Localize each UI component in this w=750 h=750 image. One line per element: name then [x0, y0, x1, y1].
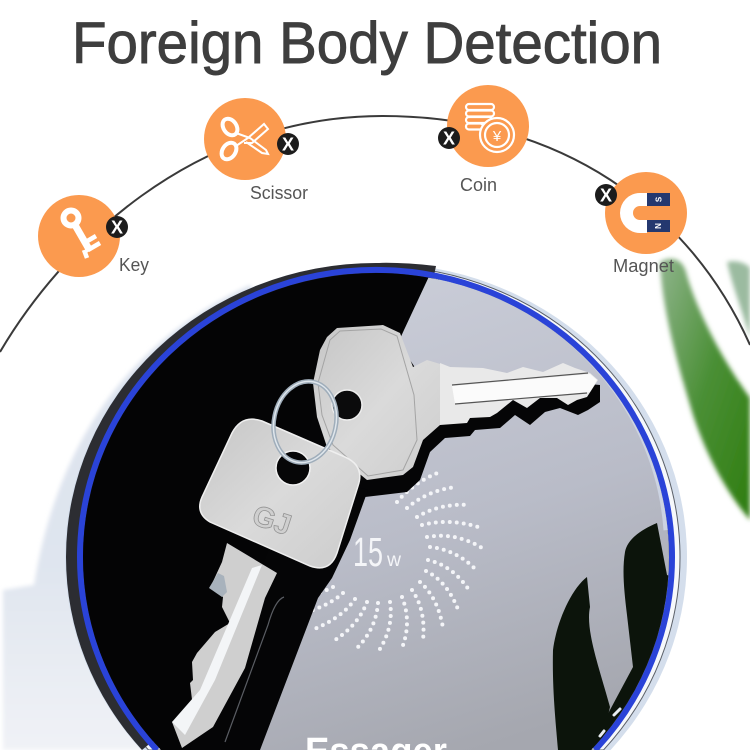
icon: magnet [620, 193, 670, 233]
reflected leaf: left [553, 577, 610, 750]
leaf: back [727, 261, 750, 338]
reflected leaf: right [591, 523, 668, 750]
dotted wireless pattern [312, 472, 483, 651]
label: magnet: Magnet [613, 256, 674, 276]
blade [440, 363, 598, 425]
cross badge: X [443, 128, 455, 148]
rim white band [72, 266, 680, 750]
key circle [38, 195, 120, 277]
icon: coins: ¥ [492, 128, 502, 145]
upper key [313, 325, 598, 480]
arc connector [0, 116, 750, 352]
item: magnet [595, 172, 687, 276]
outer rim [65, 263, 687, 750]
key hole [332, 390, 362, 420]
reflected edge line [225, 597, 284, 742]
coin circle [447, 85, 529, 167]
blade highlight [452, 374, 597, 404]
label: scissor: Scissor [250, 183, 308, 203]
cross badge: X [600, 186, 612, 206]
mirror reflection [258, 270, 700, 750]
pale inner bevel [440, 276, 668, 530]
leaf: front [660, 259, 750, 520]
lower key [172, 419, 360, 748]
magnet circle [605, 172, 687, 254]
disc shadow on surface [3, 285, 260, 750]
cross badge: X [111, 218, 123, 238]
w unit: w [386, 550, 401, 571]
lower key shadow [190, 470, 368, 750]
cross badge: X [282, 134, 294, 154]
15w text: 15 [353, 529, 383, 575]
upper key shadow [290, 345, 600, 560]
keys on charger [172, 325, 600, 750]
key hole [276, 451, 310, 485]
blue ring [80, 270, 672, 750]
blade grooves [452, 373, 588, 404]
item: scissor [204, 98, 308, 203]
icon: magnet: N [654, 223, 663, 229]
icon: scissors [219, 116, 268, 162]
blade highlight [172, 565, 262, 735]
head [313, 325, 450, 480]
wireless charger disc [60, 260, 700, 750]
ring reflection flashes [600, 709, 620, 736]
item: key [38, 195, 149, 277]
blurred plant leaves [660, 259, 750, 520]
disc face [83, 273, 669, 750]
label: key: Key [119, 255, 149, 275]
icon: key [64, 210, 100, 258]
blade notch [209, 573, 227, 597]
head [200, 419, 360, 568]
title: Foreign Body Detection [72, 11, 662, 76]
label: coin: Coin [460, 175, 497, 195]
item: coin [438, 85, 529, 195]
scissor circle [204, 98, 286, 180]
head outline [318, 329, 417, 476]
blade [172, 543, 277, 748]
icon: magnet: S [654, 196, 664, 202]
GJ emboss: GJ [248, 500, 295, 542]
key ring [266, 375, 344, 469]
black glass [83, 273, 669, 750]
rim dark bevel [66, 263, 436, 750]
